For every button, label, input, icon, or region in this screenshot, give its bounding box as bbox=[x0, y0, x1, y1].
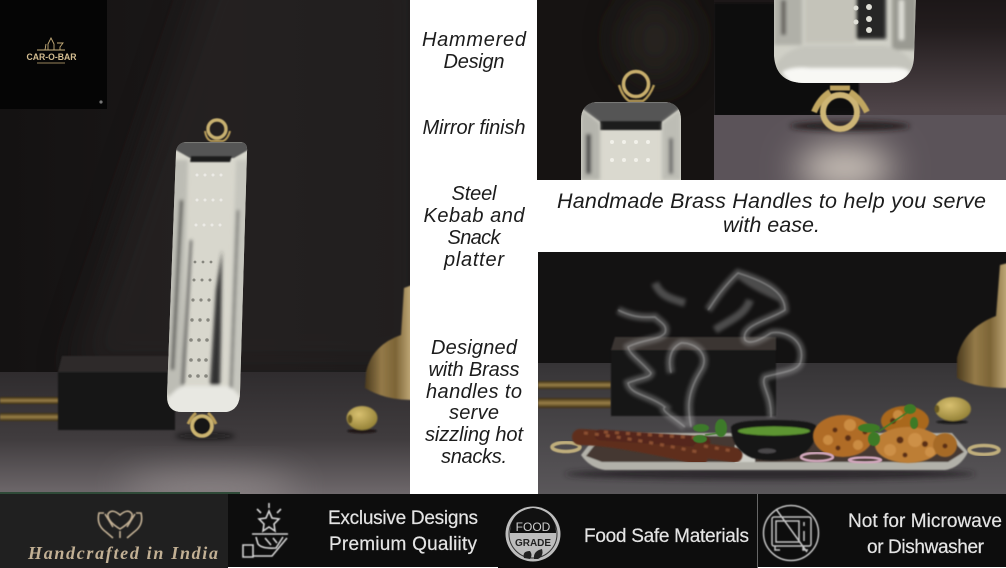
icon: bar bottles bbox=[37, 38, 65, 50]
olive bbox=[934, 397, 971, 424]
black display block bbox=[58, 356, 175, 430]
text: hammered design: Hammered bbox=[422, 29, 527, 51]
panel: exclusive designs bbox=[228, 494, 498, 567]
serving tray bbox=[581, 433, 968, 470]
panel: feature list: snacks. bbox=[441, 446, 507, 468]
logo wordmark: CAR-O-BAR bbox=[26, 52, 77, 62]
panel: not for microwave bbox=[757, 494, 1006, 568]
seekh kebabs bbox=[580, 432, 735, 457]
chutney bowl bbox=[731, 420, 817, 460]
panel: feature list: with Brass bbox=[428, 359, 520, 381]
text: handcrafted in India: Handcrafted in India bbox=[27, 543, 218, 563]
hammered dots bbox=[610, 140, 650, 162]
olive bbox=[346, 406, 378, 434]
fried snacks bbox=[813, 406, 957, 463]
panel: feature list bbox=[410, 0, 537, 494]
black display block bbox=[611, 337, 776, 416]
text: steel kebab and snack platter: Steel bbox=[452, 183, 497, 205]
panel: handcrafted in India bbox=[0, 492, 240, 568]
panel: feature list: handles to bbox=[426, 381, 522, 403]
headline: brass handles: Handmade Brass Handles to help you serve bbox=[557, 189, 986, 213]
text: exclusive designs premium quality: Exclusive Designs bbox=[328, 508, 478, 529]
brass bell bbox=[365, 285, 412, 400]
steam bbox=[618, 273, 802, 427]
panel: logo bbox=[0, 0, 107, 109]
brass handles bbox=[552, 442, 999, 454]
icon: brass handle ring bbox=[814, 88, 867, 129]
panel: feature list: Kebab and bbox=[424, 205, 525, 227]
cilantro garnish bbox=[858, 404, 918, 446]
headline: brass handles bbox=[537, 180, 1006, 252]
text: mirror finish: Mirror finish bbox=[422, 117, 526, 139]
cilantro bbox=[693, 419, 727, 443]
panel: feature list: Snack bbox=[448, 227, 502, 249]
photo: steel tray on dark background bbox=[0, 0, 430, 502]
hammered dots bbox=[854, 4, 872, 33]
icon: crossed-out microwave bbox=[764, 506, 818, 560]
text: food safe materials: Food Safe Materials bbox=[584, 526, 749, 547]
brass rods bbox=[538, 381, 611, 408]
icon: food grade badge: GRADE bbox=[515, 538, 551, 549]
photo: bottom handle close-up bbox=[714, 0, 1006, 188]
panel: feature list: serve bbox=[449, 402, 499, 424]
brass bell bbox=[957, 263, 1006, 388]
panel: food safe materials bbox=[498, 494, 757, 568]
icon: star on serving hand bbox=[243, 503, 288, 557]
icon: top brass handle bbox=[205, 120, 230, 141]
onion rings bbox=[801, 453, 881, 462]
photo: top handle close-up bbox=[537, 0, 714, 192]
panel: feature list: platter bbox=[443, 249, 505, 271]
icon: food grade badge bbox=[506, 506, 560, 562]
photo: food served on tray bbox=[538, 252, 1006, 494]
icon: hands holding heart bbox=[98, 511, 142, 538]
icon: brass handle ring bbox=[619, 72, 654, 101]
icon: brass rods bbox=[0, 397, 60, 421]
tray shadow bbox=[565, 468, 975, 480]
hammered dots bbox=[194, 174, 222, 226]
icon: bottom brass handle bbox=[188, 413, 216, 436]
icon: food grade badge: FOOD bbox=[516, 520, 551, 534]
panel: not for microwave: or Dishwasher bbox=[867, 537, 985, 558]
panel: feature list: sizzling hot bbox=[425, 424, 524, 446]
text: not for microwave or dishwasher: Not for Microwave bbox=[848, 511, 1002, 532]
tray with brass handles bbox=[164, 120, 249, 439]
headline: brass handles: with ease. bbox=[723, 213, 820, 237]
panel: exclusive designs: Premium Qualiity bbox=[329, 534, 478, 555]
panel: feature list: Design bbox=[444, 51, 504, 73]
text: designed with brass handles: Designed bbox=[431, 337, 518, 359]
